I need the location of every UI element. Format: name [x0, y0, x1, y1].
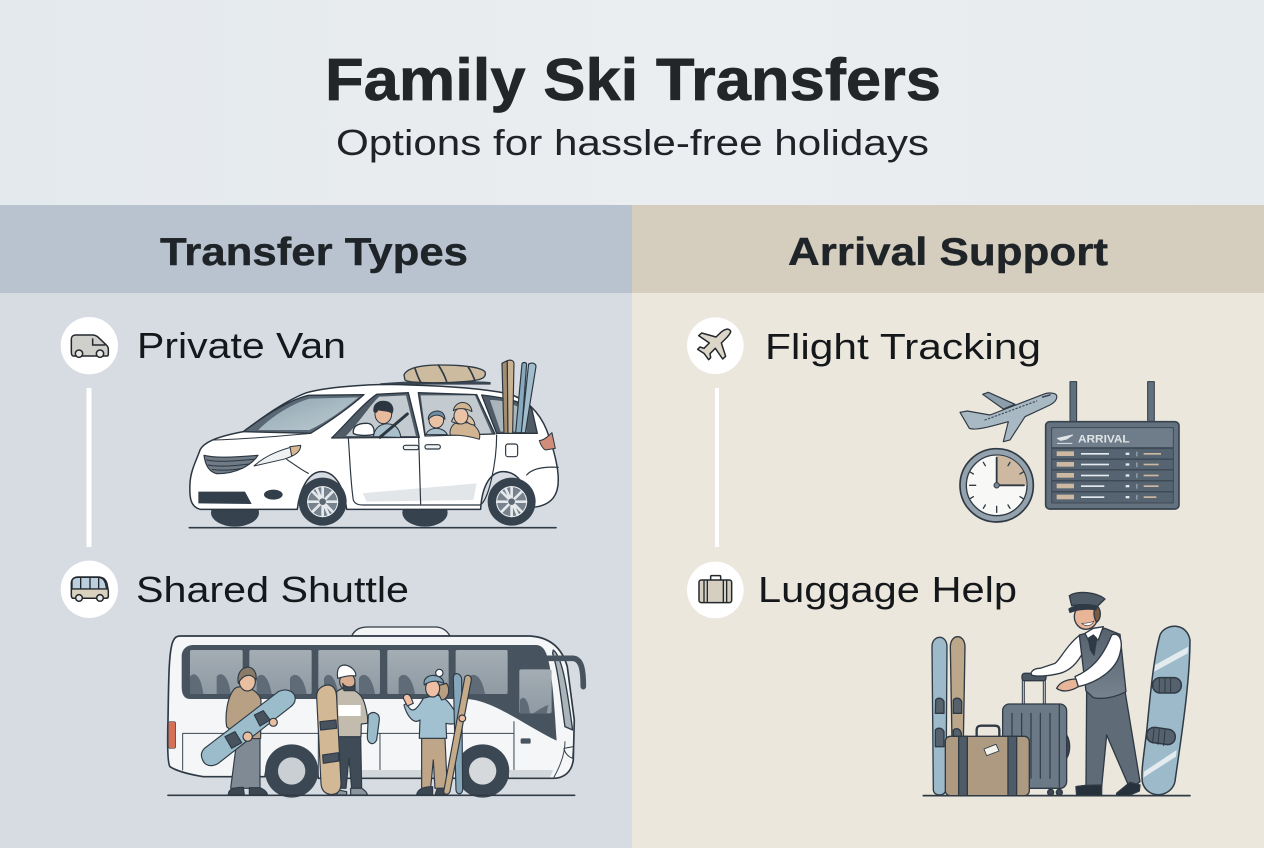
panel header band [632, 205, 1264, 293]
windshield [553, 650, 573, 730]
woman [450, 403, 480, 439]
rolling suitcase [1003, 673, 1070, 795]
heading: arrival support: Arrival Support [788, 231, 1108, 274]
bus body [168, 636, 574, 778]
skis on roof [502, 360, 536, 433]
rear wheel [488, 478, 536, 526]
tail lamp [168, 722, 176, 748]
body shading [363, 483, 477, 502]
skier with snowboard [317, 665, 379, 795]
clock [960, 449, 1033, 522]
skier waving [403, 669, 471, 795]
connector line [86, 388, 92, 547]
panel background [632, 293, 1264, 848]
grille [204, 455, 258, 474]
illustration: flight tracking [960, 382, 1179, 522]
front wheel [299, 478, 347, 526]
skier with board [201, 667, 295, 795]
icon: airplane [687, 317, 744, 374]
roof hatch [352, 627, 450, 636]
panel: arrival support [632, 205, 1264, 848]
headlight [254, 445, 301, 466]
front wheel [456, 744, 509, 798]
board heading: ARRIVAL [1078, 433, 1130, 445]
ground line [923, 793, 1190, 798]
icon: van [61, 317, 118, 374]
header background [0, 0, 1264, 205]
far tires [211, 499, 448, 527]
seats [190, 674, 548, 713]
windows [190, 650, 552, 713]
panel background [0, 293, 632, 848]
label: shared shuttle: Shared Shuttle [136, 569, 409, 610]
head light [564, 747, 573, 758]
illustration: luggage help [923, 592, 1190, 796]
ground line [189, 525, 556, 530]
snowboard [1142, 626, 1190, 795]
window band [182, 645, 557, 741]
side mirror [353, 423, 374, 435]
arrival board [1046, 422, 1179, 509]
label: flight tracking: Flight Tracking [765, 326, 1041, 367]
skis [932, 637, 965, 795]
heading: transfer types: Transfer Types [160, 231, 468, 274]
title: Family Ski Transfers [325, 47, 941, 113]
illustration: private van [189, 360, 558, 528]
label: luggage help: Luggage Help [758, 569, 1017, 610]
connector line [715, 388, 719, 547]
row content [1057, 451, 1161, 500]
skirt shading [319, 770, 553, 777]
departure rows [1052, 449, 1173, 503]
subtitle: Options for hassle-free holidays [336, 122, 929, 163]
roof box [380, 365, 491, 385]
illustration: shared shuttle [168, 627, 583, 798]
van body [190, 385, 558, 509]
side windows [332, 393, 537, 438]
door lines and handles [287, 435, 558, 505]
label: private van: Private Van [137, 325, 346, 366]
rear wheel [265, 744, 318, 798]
tan suitcase [945, 726, 1029, 796]
sign posts [1070, 382, 1154, 422]
door handle [521, 738, 531, 744]
lower panel lines [183, 722, 565, 778]
tail light [539, 433, 555, 450]
ground line [168, 793, 575, 798]
icon: luggage [687, 562, 744, 618]
porter [1031, 592, 1140, 796]
driver [373, 401, 407, 437]
panel: transfer types [0, 205, 632, 848]
airplane [960, 392, 1057, 442]
icon: shuttle [61, 561, 118, 618]
hood line [213, 433, 311, 440]
windshield [243, 395, 364, 433]
board plane mark [1057, 435, 1073, 443]
lower intake and fog light [198, 490, 283, 504]
child [426, 411, 447, 435]
panel header band [0, 205, 632, 293]
mirror arm [541, 658, 583, 687]
